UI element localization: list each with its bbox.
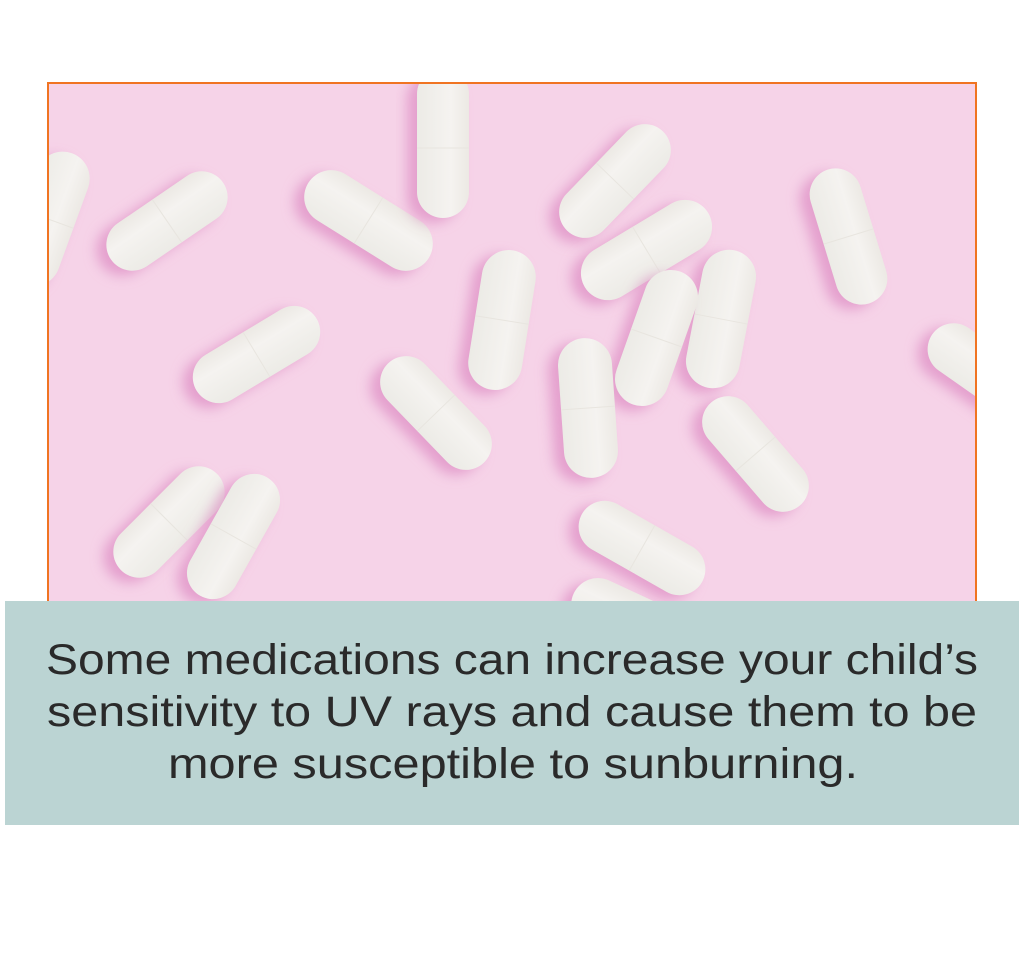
capsule 11	[556, 336, 620, 480]
capsule 6	[566, 200, 712, 310]
pink photo background	[49, 84, 975, 601]
capsule 7	[803, 162, 894, 311]
caption text: Some medications can increase your child’s	[46, 636, 978, 684]
panel: caption band	[5, 601, 1019, 825]
capsule 18	[564, 500, 706, 601]
capsule 13	[365, 356, 492, 480]
capsule 12	[183, 296, 330, 413]
capsule 1	[49, 152, 90, 284]
orange photo border	[48, 83, 976, 601]
capsule 19	[558, 578, 653, 601]
capsule 16	[98, 466, 224, 588]
caption text: more susceptible to sunburning.	[168, 740, 858, 788]
caption text: sensitivity to UV rays and cause them to be	[47, 688, 977, 736]
capsule 15	[912, 323, 975, 415]
caption text	[46, 636, 978, 788]
capsule 8	[464, 246, 540, 394]
capsule 3	[289, 170, 433, 281]
capsule 4	[417, 68, 469, 218]
capsule 17	[172, 474, 280, 601]
capsule 2	[91, 171, 228, 281]
capsule 14	[687, 396, 809, 522]
panel: pills photo	[49, 84, 975, 601]
capsule 5	[544, 124, 671, 248]
capsule 9	[608, 268, 698, 416]
capsule 10	[681, 245, 761, 393]
